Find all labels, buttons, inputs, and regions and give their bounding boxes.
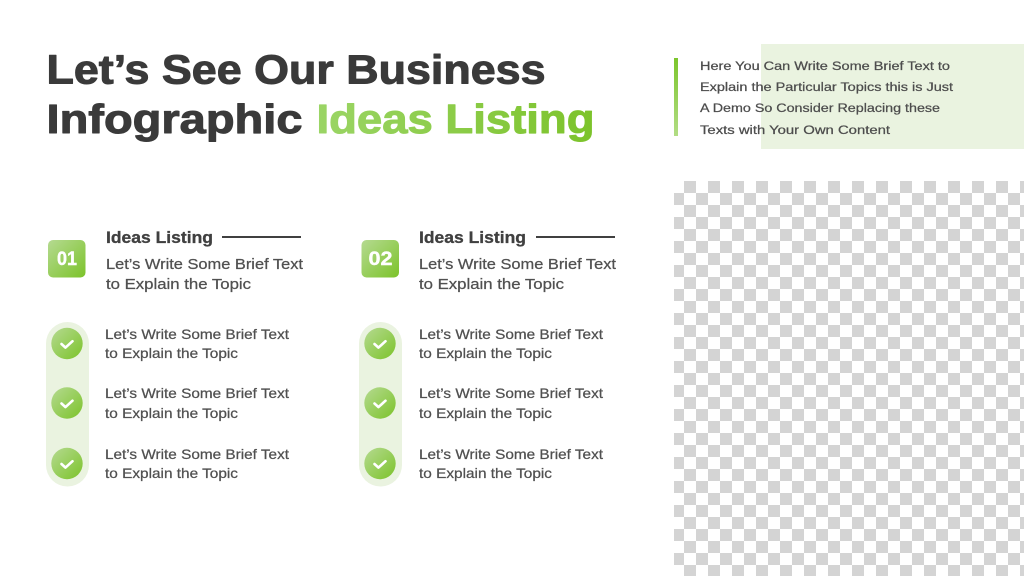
- intro text block: [700, 59, 954, 137]
- list item 2: Let’s Write Some Brief Text: [105, 386, 289, 401]
- heading 02: Ideas Listing: [419, 229, 526, 247]
- list item 2: Let’s Write Some Brief Text: [419, 386, 603, 401]
- badge 02: [362, 240, 399, 278]
- list item 1: [105, 327, 289, 361]
- description 01: [106, 257, 303, 293]
- heading 01: Ideas Listing: [106, 229, 213, 247]
- check icon 3: [364, 448, 396, 479]
- panel: ideas listing 01: [46, 229, 303, 486]
- title: Infographic: [46, 96, 302, 142]
- list item 2: to Explain the Topic: [419, 406, 552, 421]
- panel: ideas listing 02: [359, 229, 616, 486]
- list item 2: to Explain the Topic: [105, 406, 238, 421]
- check icon 1: [51, 328, 83, 359]
- intro text block: A Demo So Consider Replacing these: [700, 101, 940, 115]
- check icon 3: [51, 448, 83, 479]
- badge 01: [48, 240, 86, 278]
- badge 02: 02: [368, 248, 393, 270]
- checklist pill 01: [46, 322, 89, 486]
- intro text block: Texts with Your Own Content: [700, 123, 891, 137]
- list item 3: Let’s Write Some Brief Text: [105, 447, 289, 462]
- list item 3: to Explain the Topic: [105, 466, 238, 481]
- list item 3: [105, 447, 289, 481]
- pale green panel behind intro text: [761, 44, 1024, 149]
- accent bar: [674, 58, 678, 136]
- list item 3: to Explain the Topic: [419, 466, 552, 481]
- check icon 2: [51, 387, 83, 419]
- title: [46, 46, 594, 142]
- list item 1: to Explain the Topic: [105, 346, 238, 361]
- title: Ideas Listing: [316, 96, 594, 142]
- list item 3: Let’s Write Some Brief Text: [419, 447, 603, 462]
- description 02: Let’s Write Some Brief Text: [419, 257, 616, 273]
- list item 2: [105, 386, 289, 421]
- list item 3: [419, 447, 603, 481]
- description 01: Let’s Write Some Brief Text: [106, 257, 303, 273]
- list item 1: Let’s Write Some Brief Text: [419, 327, 603, 342]
- transparent checkerboard image placeholder: [674, 181, 1024, 576]
- list item 2: [419, 386, 603, 421]
- badge 01: 01: [57, 248, 77, 270]
- list item 1: to Explain the Topic: [419, 346, 552, 361]
- description 01: to Explain the Topic: [106, 277, 252, 293]
- description 02: to Explain the Topic: [419, 277, 565, 293]
- intro text block: Explain the Particular Topics this is Just: [700, 80, 954, 94]
- intro text block: Here You Can Write Some Brief Text to: [700, 59, 950, 73]
- title: Let’s See Our Business: [46, 46, 546, 92]
- check icon 1: [364, 328, 396, 359]
- description 02: [419, 257, 616, 293]
- check icon 2: [364, 387, 396, 419]
- checklist pill 02: [359, 322, 402, 486]
- list item 1: [419, 327, 603, 361]
- list item 1: Let’s Write Some Brief Text: [105, 327, 289, 342]
